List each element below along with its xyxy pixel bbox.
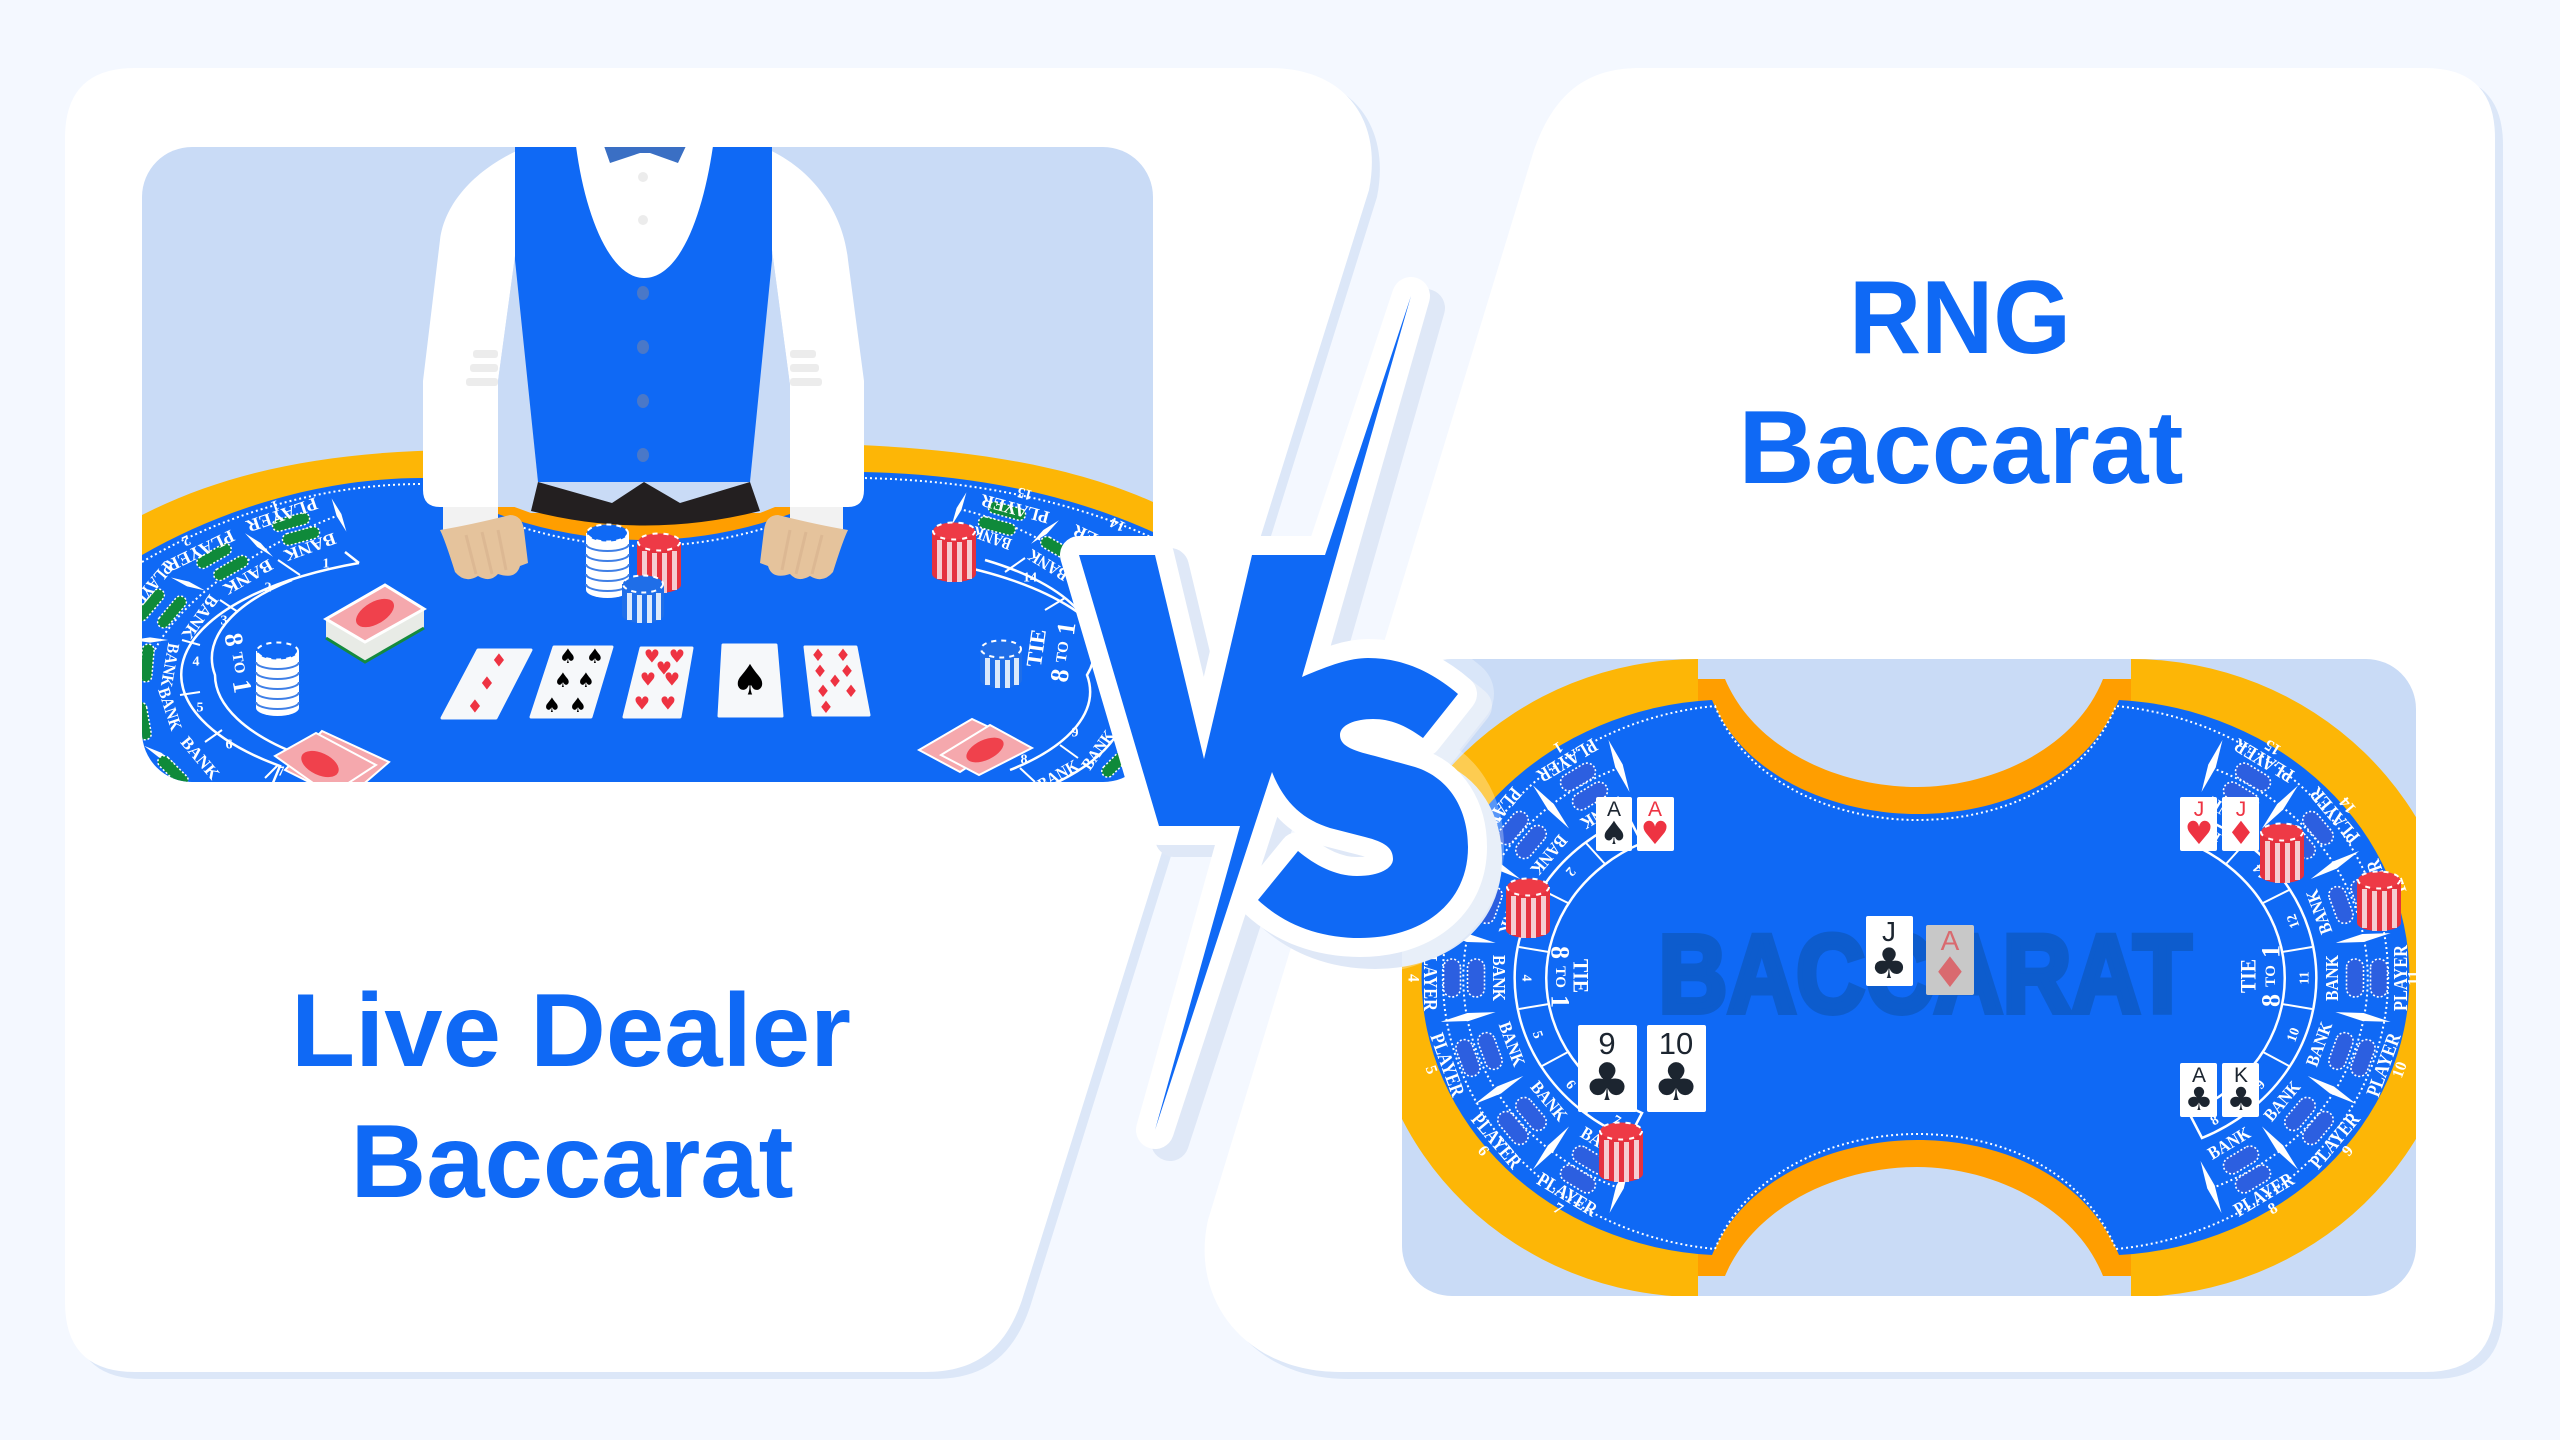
card: king of clubs: ♣ <box>2227 1080 2255 1118</box>
face-up card: 3 of diamonds <box>442 650 531 718</box>
table labels: 4 <box>192 654 200 670</box>
table labels: PLAYER <box>123 559 177 618</box>
shirt front <box>576 146 713 286</box>
table labels: BANK <box>1024 545 1072 585</box>
right ring labels: PLAYER <box>2230 733 2298 786</box>
heading: RNG Baccarat: RNG <box>1849 260 2071 376</box>
card: dimmed ace of diamonds <box>1926 925 1974 997</box>
card: jack of diamonds <box>2222 797 2259 852</box>
card: ace of hearts <box>1637 797 1674 852</box>
heading: RNG Baccarat: Baccarat <box>1738 390 2184 506</box>
orange notch bands <box>1698 679 2131 1276</box>
right ring labels: BANK <box>2204 1123 2254 1163</box>
right ring labels: 8 <box>2208 1113 2222 1129</box>
left ring labels: BANK <box>1527 1077 1571 1125</box>
right ring labels: PLAYER <box>2362 1030 2406 1100</box>
left ring labels: 6 <box>1562 1077 1578 1093</box>
sleeve folds <box>466 350 822 386</box>
card: nine of clubs: ♣ <box>1584 1053 1630 1113</box>
left ring labels: BANK <box>1577 793 1627 833</box>
table labels: 8 TO 1 <box>218 631 258 695</box>
right ring labels: 14 <box>2336 793 2360 817</box>
card: jack of clubs: ♣ <box>1870 939 1908 988</box>
card: nine of clubs: 9 <box>1598 1026 1616 1061</box>
left ring labels: BANK <box>1495 1019 1529 1069</box>
left ring labels: BANK <box>1527 831 1571 879</box>
card: jack of hearts: J <box>2194 798 2204 821</box>
table labels: 9 <box>1072 726 1078 740</box>
right ring labels: TIE <box>2236 959 2260 993</box>
pale notches <box>1725 679 2103 1276</box>
green betting pills <box>133 500 1135 789</box>
table labels: BANK <box>1078 726 1119 773</box>
face-up card: 6 of spades: ♠ <box>554 668 572 692</box>
compass stars <box>132 491 1061 766</box>
shirt cuffs <box>443 507 843 531</box>
right ring labels: BANK <box>2322 955 2342 1001</box>
illustration: top-down RNG baccarat table <box>1368 655 2461 1300</box>
left ring labels: PLAYER <box>1425 1030 1469 1100</box>
left ring labels: 2 <box>1562 863 1578 879</box>
vest buttons <box>637 286 649 462</box>
right ring labels: 12 <box>2285 912 2303 930</box>
face-up card: 8 of diamonds: ♦ <box>810 646 826 666</box>
table labels: 8 TO 1 <box>1044 620 1082 684</box>
right ring labels: 10 <box>2285 1026 2303 1044</box>
illustration: live dealer at baccarat table <box>123 146 1153 800</box>
BACCARAT watermark: BACCARAT <box>1658 913 2192 1036</box>
gold rim lobes <box>1368 659 2461 1297</box>
card: ace of hearts: A <box>1648 798 1662 821</box>
table labels: BANK <box>969 522 1014 554</box>
left ring labels <box>1404 734 1627 1222</box>
right hand <box>760 515 848 579</box>
card: ten of clubs <box>1647 1025 1706 1113</box>
face-up card: 6 of spades: ♠ <box>586 644 604 668</box>
face-up card: 7 of hearts: ♥ <box>656 658 672 680</box>
left ring labels: PLAYER <box>1419 945 1441 1011</box>
table labels: 3 <box>220 614 228 628</box>
card: jack of clubs: J <box>1882 916 1896 947</box>
left ring labels: 5 <box>1422 1063 1440 1077</box>
face-up card: 8 of diamonds: ♦ <box>818 698 834 718</box>
face-up card: 7 of hearts: ♥ <box>664 670 680 690</box>
table labels <box>123 483 1128 794</box>
waist sash <box>531 482 760 526</box>
left ring labels: 1 <box>1550 738 1566 756</box>
red chip stacks <box>1506 824 2401 1182</box>
left betting ring <box>1440 739 1642 1214</box>
right ring labels: 8 TO 1 <box>2256 945 2286 1007</box>
face-up card: 3 of diamonds: ♦ <box>479 674 495 694</box>
table labels: 2 <box>264 580 272 596</box>
vest <box>515 146 772 482</box>
white shirt <box>423 146 864 507</box>
table labels: BANK <box>281 529 339 565</box>
table labels: BANK <box>1034 755 1082 794</box>
table labels: BANK <box>177 733 224 784</box>
face-up card: 8 of diamonds: ♦ <box>839 662 855 682</box>
left ring labels: PLAYER <box>1466 1109 1526 1174</box>
face-up card: 3 of diamonds: ♦ <box>491 650 507 672</box>
face-up card: ace of spades <box>719 645 782 716</box>
right ring labels: 9 <box>2339 1142 2357 1160</box>
table labels: PLAYER <box>978 490 1051 528</box>
face-up card: 8 of diamonds: ♦ <box>835 646 851 666</box>
right ring labels <box>2204 733 2422 1221</box>
table labels: TIE <box>1021 627 1051 669</box>
card backs bottom right <box>919 719 1032 775</box>
card: ace of spades: ♠ <box>1600 814 1628 852</box>
table labels: 2 <box>179 531 193 549</box>
table labels: ER <box>1069 520 1101 549</box>
face-up card: 7 of hearts: ♥ <box>640 670 656 690</box>
dealer <box>423 146 864 579</box>
card: jack of clubs <box>1866 916 1913 988</box>
right ring labels: PLAYER <box>2390 945 2412 1011</box>
table labels: BANK <box>219 555 276 599</box>
right ring labels: BANK <box>2260 1077 2304 1125</box>
right ring labels: 11 <box>2298 971 2312 985</box>
table labels: 7 <box>278 764 284 780</box>
light blue gaps between sleeve and vest <box>498 250 790 507</box>
card: king of clubs: K <box>2234 1064 2248 1087</box>
left ring labels: 7 <box>1550 1200 1566 1218</box>
left ring labels: 4 <box>1518 974 1534 982</box>
right ring labels: 10 <box>2389 1060 2411 1080</box>
face-up card: 8 of diamonds: ♦ <box>843 682 859 702</box>
VS badge with lightning slash <box>1079 296 1483 1142</box>
table labels: 5 <box>196 700 204 716</box>
left ring labels: TIE <box>1568 959 1594 993</box>
table labels: 8 <box>1020 752 1028 768</box>
card: king of clubs <box>2222 1063 2259 1118</box>
left ring labels: PLAYER <box>1466 783 1526 848</box>
card: jack of diamonds: J <box>2236 798 2246 821</box>
left ring labels: 5 <box>1529 1029 1545 1041</box>
face-up card: 6 of spades: ♠ <box>569 693 587 717</box>
right ring labels: 15 <box>2205 825 2225 845</box>
card backs bottom left <box>273 730 391 782</box>
table labels: PLAYER <box>161 526 238 577</box>
heading: Live Dealer Baccarat: Baccarat <box>350 1104 794 1220</box>
table labels: BANK <box>157 642 183 689</box>
face-up card: 7 of hearts: ♥ <box>660 694 676 714</box>
left ring labels: 4 <box>1404 974 1422 982</box>
left hand <box>440 515 528 579</box>
face-up card: 7 of hearts: ♥ <box>634 694 650 714</box>
card deck <box>326 585 424 662</box>
card: dimmed ace of diamonds: ♦ <box>1931 948 1969 997</box>
face-up card: 6 of spades: ♠ <box>559 644 577 668</box>
face-up card: 7 of hearts <box>624 646 692 717</box>
card: ace of spades <box>1596 797 1632 852</box>
face-up card: ace of spades: ♠ <box>731 656 769 704</box>
face-up card: 6 of spades <box>531 644 612 717</box>
right betting ring <box>2189 739 2391 1214</box>
card: jack of hearts <box>2180 797 2217 852</box>
card: ten of clubs: ♣ <box>1653 1053 1699 1113</box>
left ring labels: BANK <box>1577 1123 1627 1163</box>
right ring labels: BANK <box>2302 887 2336 937</box>
table labels: BANK <box>154 685 186 734</box>
card: ten of clubs: 10 <box>1659 1026 1693 1061</box>
right ring labels: 9 <box>2253 1077 2269 1093</box>
left ring labels: 3 <box>1529 915 1545 927</box>
face-up card: 8 of diamonds: ♦ <box>827 672 843 692</box>
left ring labels: 7 <box>1609 1113 1623 1129</box>
left ring labels: BANK <box>1495 887 1529 937</box>
heading: RNG Baccarat <box>1738 260 2184 506</box>
panel: RNG card <box>1205 68 2503 1379</box>
table labels: 14 <box>1023 570 1037 586</box>
right ring labels: 14 <box>2251 861 2271 881</box>
right ring labels: PLAYER <box>2362 856 2406 926</box>
left ring labels: 2 <box>1474 796 1492 814</box>
panel: live dealer card <box>65 68 1380 1379</box>
face-up card: 6 of spades: ♠ <box>577 668 595 692</box>
table labels: PLAYER <box>243 493 320 537</box>
heading: Live Dealer Baccarat <box>291 973 851 1220</box>
card: ace of clubs: ♣ <box>2185 1080 2213 1118</box>
right ring labels: BANK <box>2204 793 2254 833</box>
orange dealer cutout <box>498 507 790 540</box>
face-up card: 6 of spades: ♠ <box>543 693 561 717</box>
card: dimmed ace of diamonds: A <box>1941 925 1960 956</box>
card: nine of clubs <box>1578 1025 1637 1113</box>
face-up card: 8 of diamonds <box>805 646 869 718</box>
face-up card: 8 of diamonds: ♦ <box>815 682 831 702</box>
card: ace of clubs: A <box>2192 1064 2206 1087</box>
right ring labels: 8 <box>2265 1200 2281 1218</box>
right ring labels: PLAYER <box>2305 782 2365 847</box>
left ring labels: PLAYER <box>1425 856 1469 926</box>
table labels: 14 <box>1107 513 1128 534</box>
table felt <box>1422 700 2409 1255</box>
face-up card: 3 of diamonds: ♦ <box>467 696 483 718</box>
betting rings left <box>150 515 359 790</box>
card: jack of diamonds: ♦ <box>2227 814 2255 852</box>
heading: Live Dealer Baccarat: Live Dealer <box>291 973 851 1089</box>
table labels: 1 <box>269 496 281 514</box>
bow tie <box>604 146 686 163</box>
card: ace of spades: A <box>1607 798 1621 821</box>
card: jack of hearts: ♥ <box>2185 814 2213 852</box>
left ring labels: PLAYER <box>1533 734 1601 787</box>
card: ace of hearts: ♥ <box>1641 814 1669 852</box>
face-up card: 7 of hearts: ♥ <box>669 646 685 668</box>
left ring labels: 1 <box>1609 827 1623 843</box>
left ring labels: PLAYER <box>1533 1169 1601 1222</box>
left ring labels: BANK <box>1489 955 1509 1001</box>
right ring labels: 12 <box>2389 876 2411 896</box>
table labels: 6 <box>226 738 232 752</box>
shirt buttons <box>638 172 648 225</box>
card: ace of clubs <box>2180 1063 2217 1118</box>
table labels: 1 <box>322 556 330 572</box>
right ring labels: PLAYER <box>2305 1108 2365 1173</box>
face-up card: 7 of hearts: ♥ <box>644 646 660 668</box>
table rim: gold <box>142 445 1153 555</box>
right ring labels: 15 <box>2262 736 2284 758</box>
betting rings right <box>964 509 1114 782</box>
left ring labels: 8 TO 1 <box>1546 946 1574 1008</box>
right ring labels: BANK <box>2302 1019 2336 1069</box>
table felt <box>142 472 1153 782</box>
table labels: BANK <box>177 591 222 644</box>
chip stacks <box>256 522 1022 716</box>
left ring labels: 3 <box>1422 879 1440 893</box>
table labels: 15 <box>1016 483 1034 503</box>
right ring labels: PLAYER <box>2230 1168 2298 1221</box>
right ring labels: 11 <box>2406 970 2422 986</box>
right ring labels: BANK <box>2260 831 2304 879</box>
left ring labels: 6 <box>1474 1142 1492 1160</box>
face-up card: 8 of diamonds: ♦ <box>812 662 828 682</box>
